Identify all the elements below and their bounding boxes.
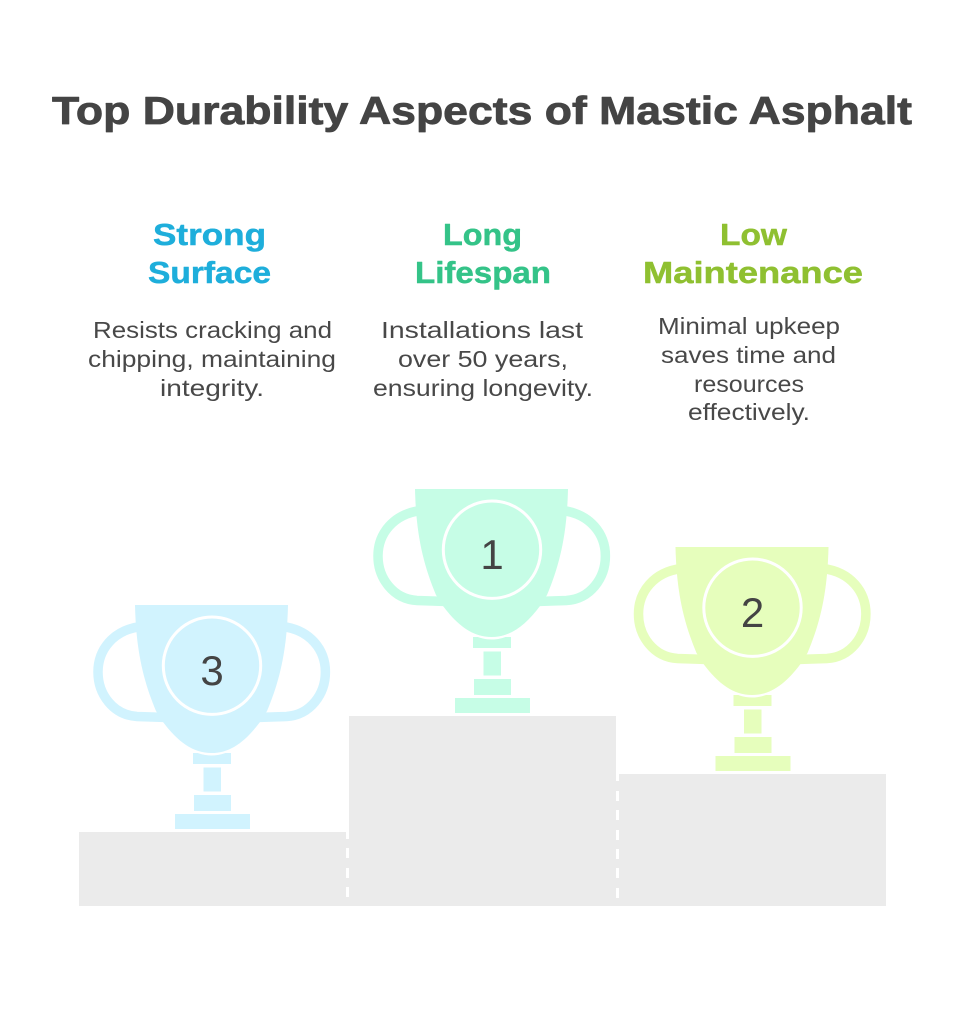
text: Strong Surface description: Resists cracking and — [93, 317, 332, 343]
trophy: rank 2 — [638, 547, 866, 771]
text: Low Maintenance description — [658, 313, 840, 425]
text: Long Lifespan description — [373, 317, 593, 401]
text: Low Maintenance description: Minimal upkeep — [658, 313, 840, 339]
podium — [79, 716, 886, 906]
text: Strong Surface description: chipping, maintaining — [88, 346, 336, 372]
text: Low Maintenance description: saves time and — [661, 342, 836, 368]
trophy: rank 1: 1 — [480, 531, 504, 578]
heading: Long Lifespan — [415, 217, 551, 290]
trophy: rank 3: 3 — [200, 647, 224, 694]
heading: Low Maintenance: Maintenance — [643, 255, 863, 290]
title: Top Durability Aspects of Mastic Asphalt — [52, 90, 912, 133]
heading: Strong Surface: Strong — [153, 217, 266, 252]
heading: Long Lifespan: Long — [443, 217, 522, 252]
text: Strong Surface description — [88, 317, 336, 401]
text: Low Maintenance description: resources — [694, 371, 804, 397]
heading: Strong Surface — [148, 217, 271, 290]
trophy: rank 2: 2 — [741, 589, 764, 636]
heading: Long Lifespan: Lifespan — [415, 255, 551, 290]
trophy: rank 3 — [98, 605, 325, 829]
trophy: rank 1 — [378, 489, 605, 713]
heading: Low Maintenance — [643, 217, 863, 290]
text: Strong Surface description: integrity. — [160, 375, 264, 401]
heading: Strong Surface: Surface — [148, 255, 271, 290]
text: Low Maintenance description: effectively. — [688, 399, 810, 425]
text: Long Lifespan description: ensuring longevity. — [373, 375, 593, 401]
text: Long Lifespan description: Installations last — [381, 317, 584, 343]
text: Long Lifespan description: over 50 years, — [398, 346, 568, 372]
heading: Low Maintenance: Low — [720, 217, 788, 252]
